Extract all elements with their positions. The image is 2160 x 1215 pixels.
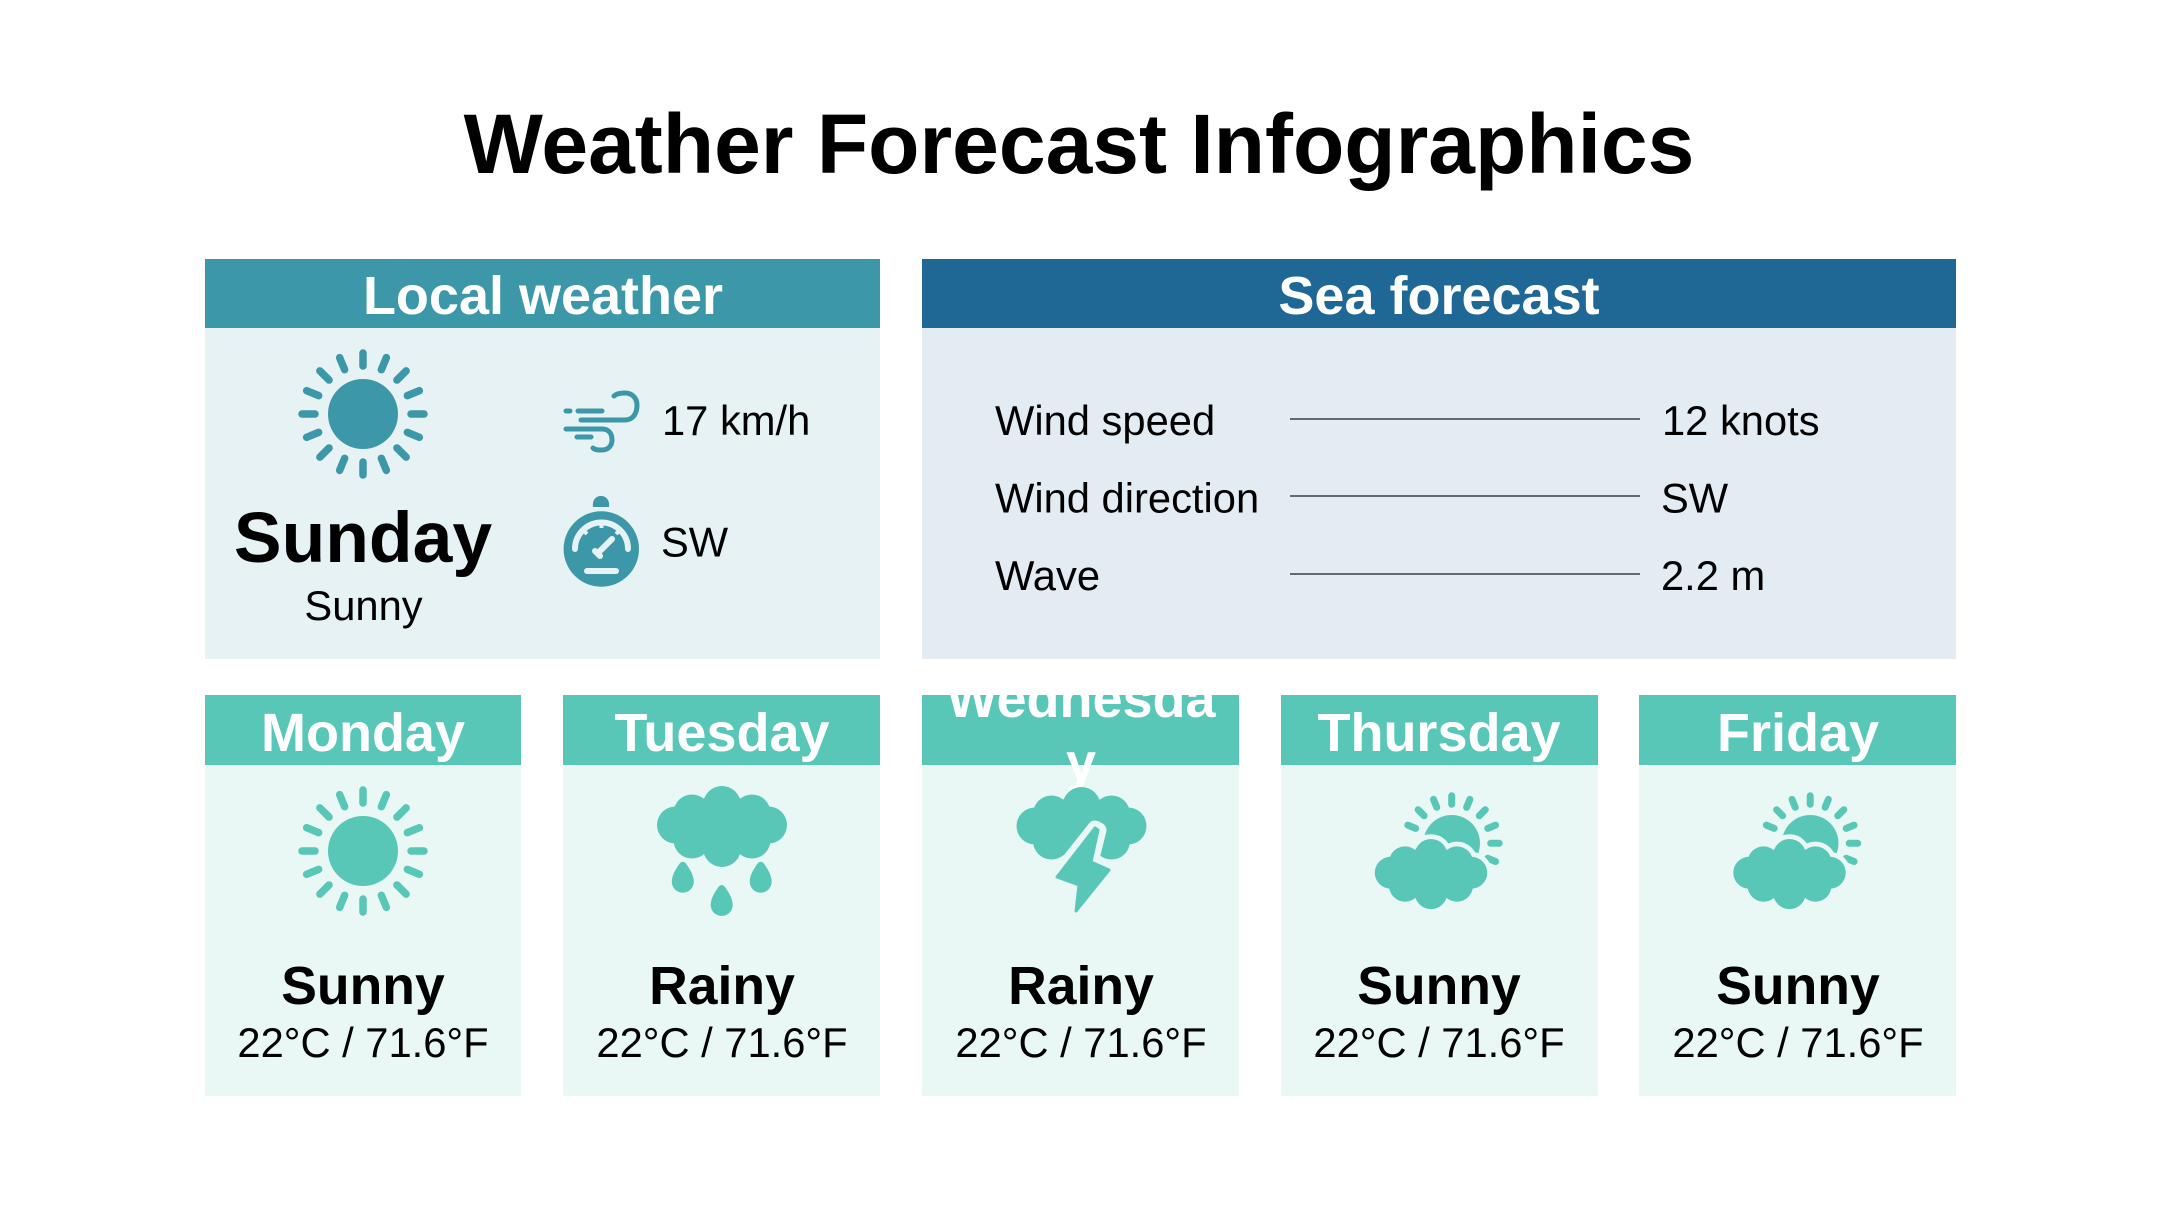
card: Monday: [205, 695, 521, 1096]
row: wind speed: 12 knots: [1662, 397, 1820, 444]
row: wave: [995, 552, 1765, 599]
icon: wind: [566, 393, 637, 450]
condition: Sunny: [1357, 957, 1521, 1016]
row: wind direction: [995, 474, 1729, 522]
heading: local weather: Local weather: [363, 266, 723, 326]
icon: thunder cloud: [1016, 787, 1146, 912]
temperature: 22°C / 71.6°F: [596, 1019, 848, 1066]
row: wind direction: Wind direction: [995, 474, 1259, 522]
icon: sun: [302, 790, 424, 912]
row: wind direction: SW: [1661, 474, 1729, 522]
panel: sea forecast: [922, 259, 1956, 659]
panel: local weather: [205, 259, 880, 659]
wind speed value: 17 km/h: [662, 397, 810, 444]
icon: sun behind cloud: [1375, 796, 1499, 909]
condition: Sunny: [1716, 957, 1880, 1016]
icon: rain cloud: [657, 786, 787, 916]
card: Wednesday: [922, 669, 1239, 1096]
row: wave: 2.2 m: [1661, 552, 1765, 599]
day name: Sunday: Sunday: [234, 498, 492, 578]
icon: gauge: [564, 496, 639, 587]
heading: Friday: Friday: [1717, 703, 1879, 763]
wind direction value: SW: [661, 518, 729, 566]
heading: Wednesday (wrapped): [946, 669, 1217, 793]
condition: Sunny: [281, 957, 445, 1016]
heading: Tuesday: Tuesday: [614, 703, 830, 763]
card: Thursday: [1281, 695, 1598, 1096]
condition: Sunny: Sunny: [304, 582, 423, 629]
icon: sun: [302, 353, 424, 475]
card: Friday: [1639, 695, 1956, 1096]
heading: Thursday: Thursday: [1317, 703, 1561, 763]
card: Tuesday: [563, 695, 880, 1096]
row: wind speed: [995, 397, 1820, 444]
heading: sea forecast: Sea forecast: [1278, 266, 1600, 326]
row: wave: Wave: [995, 552, 1100, 599]
heading: Monday: Monday: [261, 703, 465, 763]
title: Weather Forecast Infographics: [464, 97, 1694, 191]
row: wind speed: Wind speed: [995, 397, 1215, 444]
temperature: 22°C / 71.6°F: [955, 1019, 1207, 1066]
temperature: 22°C / 71.6°F: [1672, 1019, 1924, 1066]
condition: Rainy: [649, 957, 795, 1016]
temperature: 22°C / 71.6°F: [1313, 1019, 1565, 1066]
icon: sun behind cloud: [1733, 796, 1858, 909]
temperature: 22°C / 71.6°F: [237, 1019, 489, 1066]
condition: Rainy: [1008, 957, 1154, 1016]
heading: Wednesday (wrapped): y: [1066, 733, 1096, 793]
heading: Wednesday (wrapped): Wednesda: [946, 669, 1217, 729]
